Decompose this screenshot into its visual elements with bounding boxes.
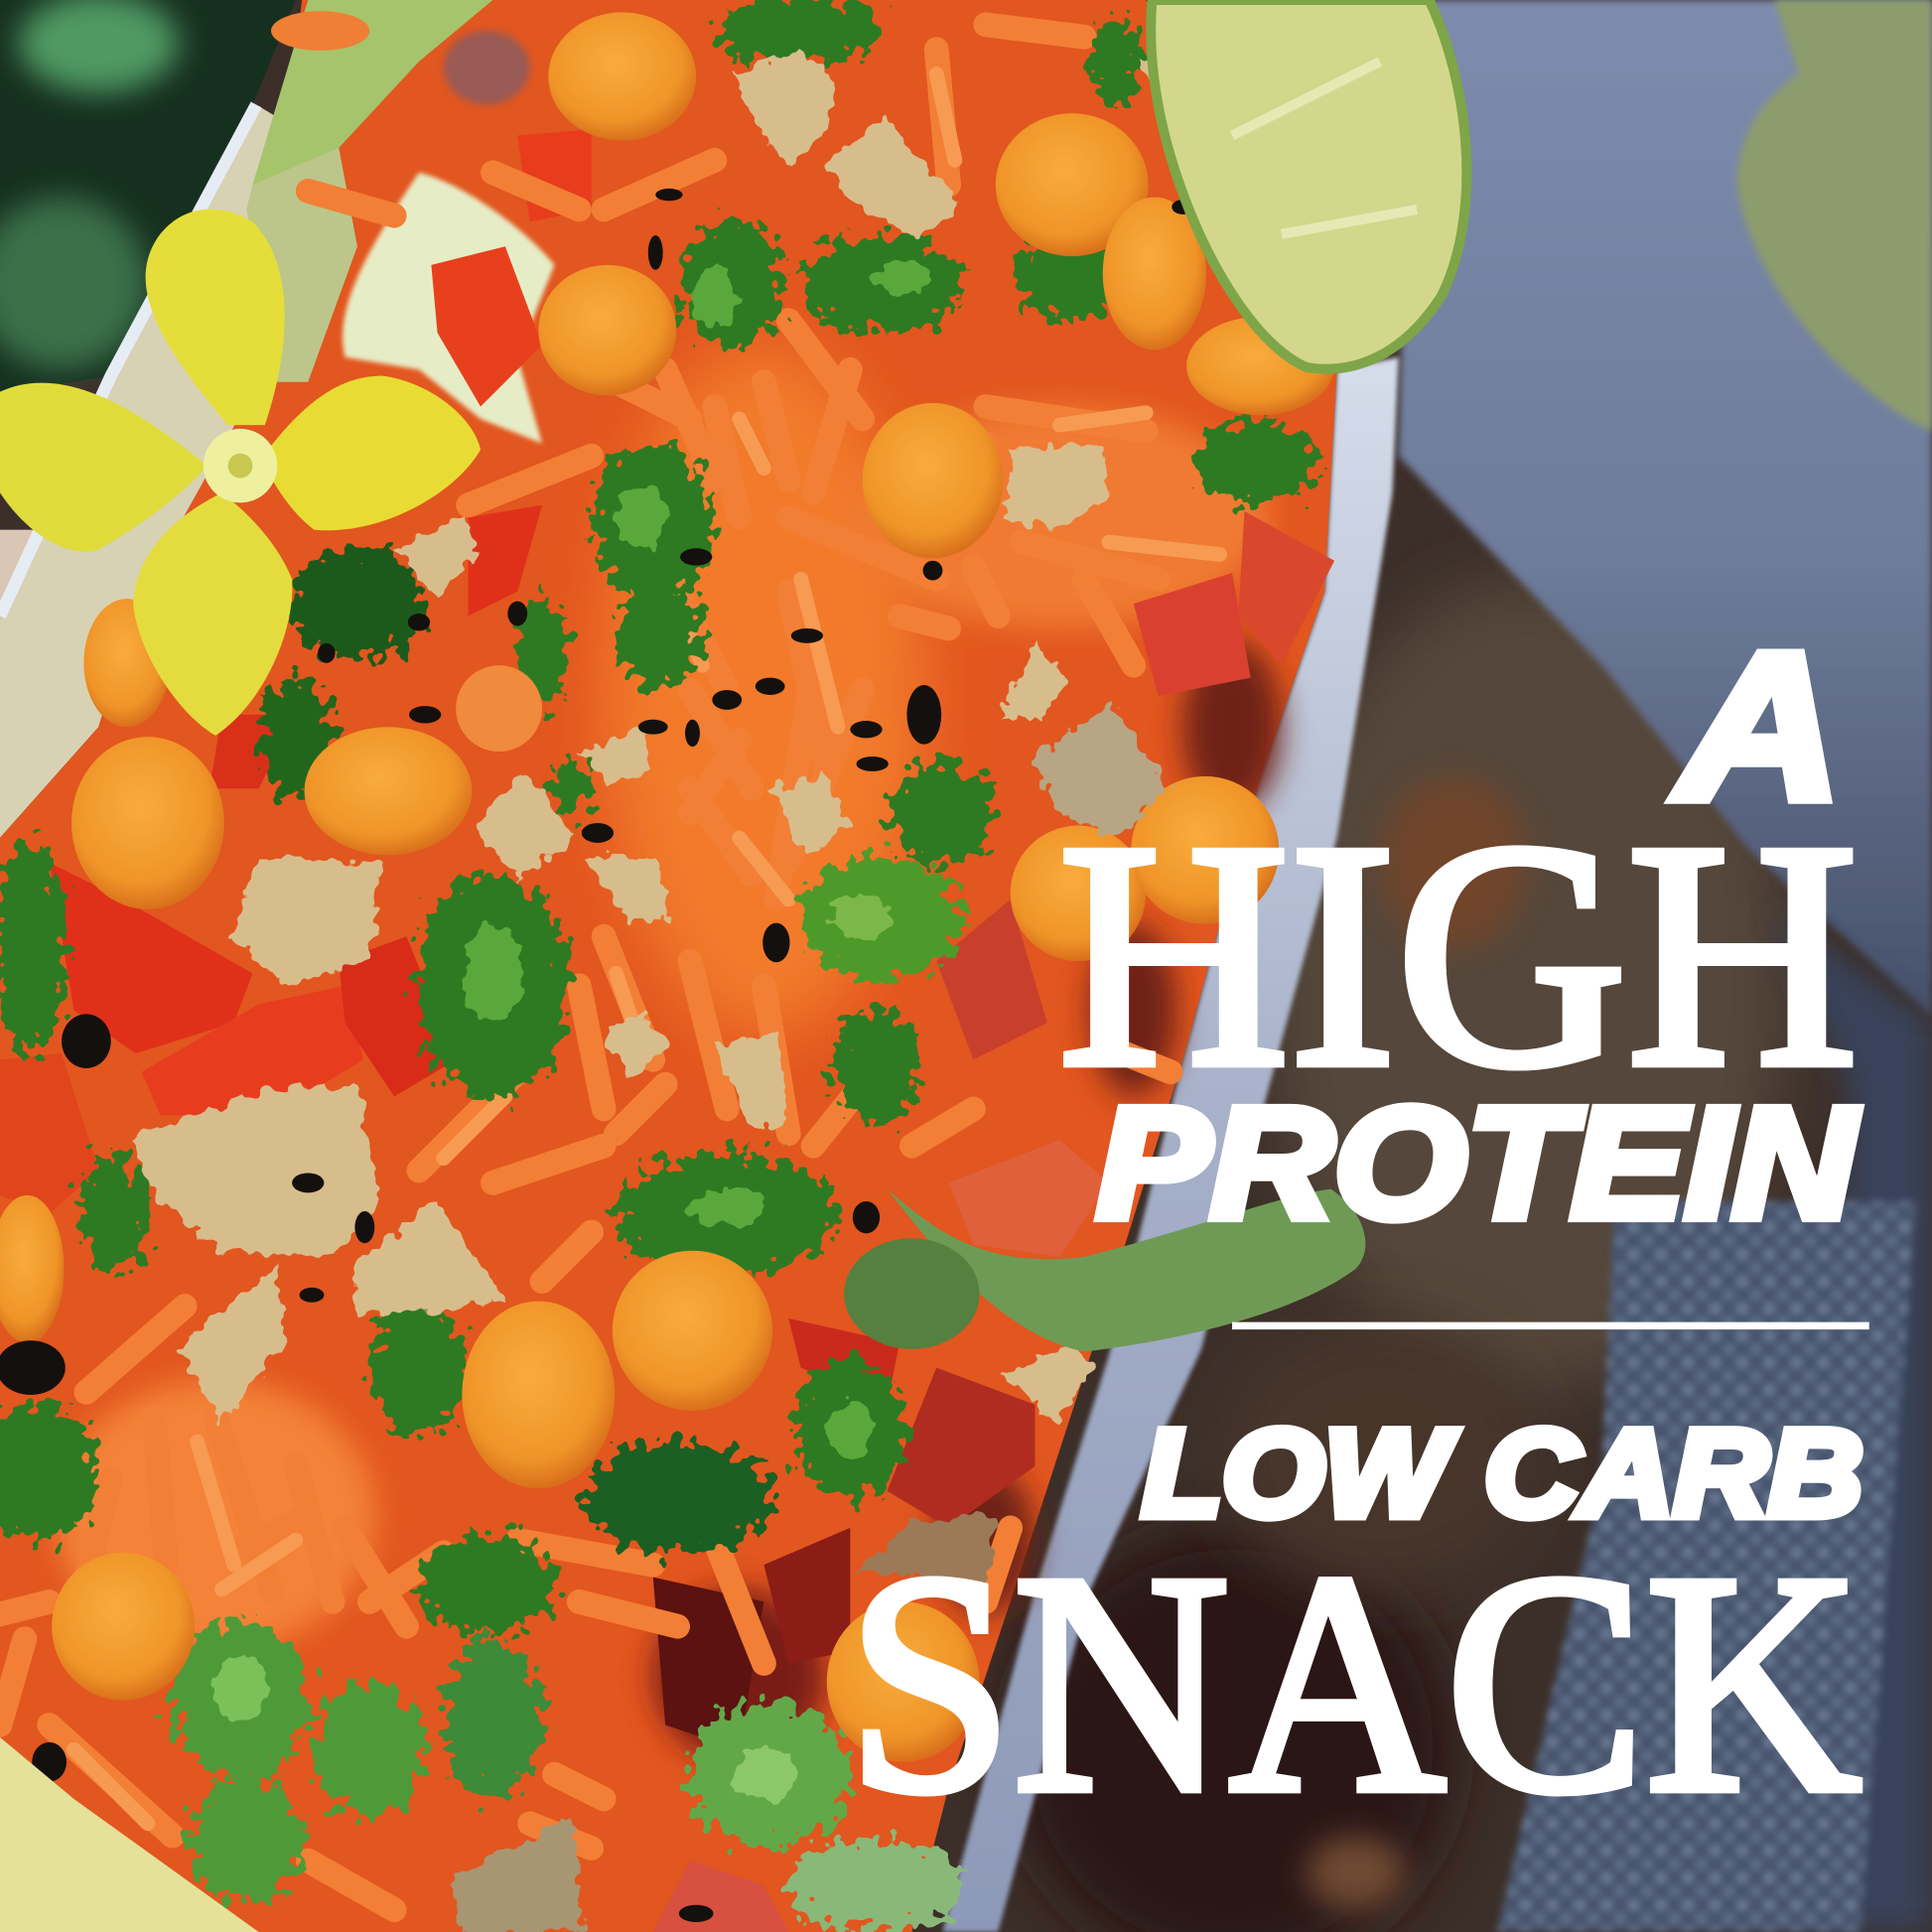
parsley highlights	[213, 260, 929, 1801]
lettuce and cauliflower, top	[246, 0, 554, 444]
tomato pieces	[0, 129, 1334, 1932]
blue cloth top right	[1399, 0, 1932, 1932]
patterned cloth bottom right	[1497, 1201, 1916, 1932]
headline words: LOW CARB: LOW CARB	[1142, 1406, 1863, 1543]
lime wedge	[1151, 0, 1466, 369]
shredded carrot	[0, 25, 1171, 1910]
bright carrot areas and shadows	[56, 345, 1282, 1762]
lighter carrot shreds	[73, 73, 1220, 1824]
headline word: SNACK: SNACK	[847, 1508, 1862, 1858]
headline word: A: A	[1673, 609, 1842, 843]
blurred lime top right	[1737, 0, 1932, 431]
dark foliage top left	[0, 0, 296, 394]
parsley sprigs	[0, 0, 1318, 1932]
yellow flower	[0, 209, 481, 736]
textured protein crisps	[129, 50, 1201, 1932]
bowl: interior and rims	[0, 104, 1399, 1932]
headline word: PROTEIN: PROTEIN	[1097, 1074, 1860, 1251]
dark green lettuce under leaf	[844, 1238, 980, 1349]
food base	[0, 0, 1337, 1932]
divider line	[1232, 1322, 1869, 1329]
puffed snack balls	[0, 12, 1334, 1762]
lemon corner bottom left	[0, 1737, 259, 1932]
lettuce leaf lower right	[888, 1189, 1365, 1351]
black seeds	[0, 189, 1194, 1922]
headline word: HIGH: HIGH	[1058, 776, 1859, 1134]
